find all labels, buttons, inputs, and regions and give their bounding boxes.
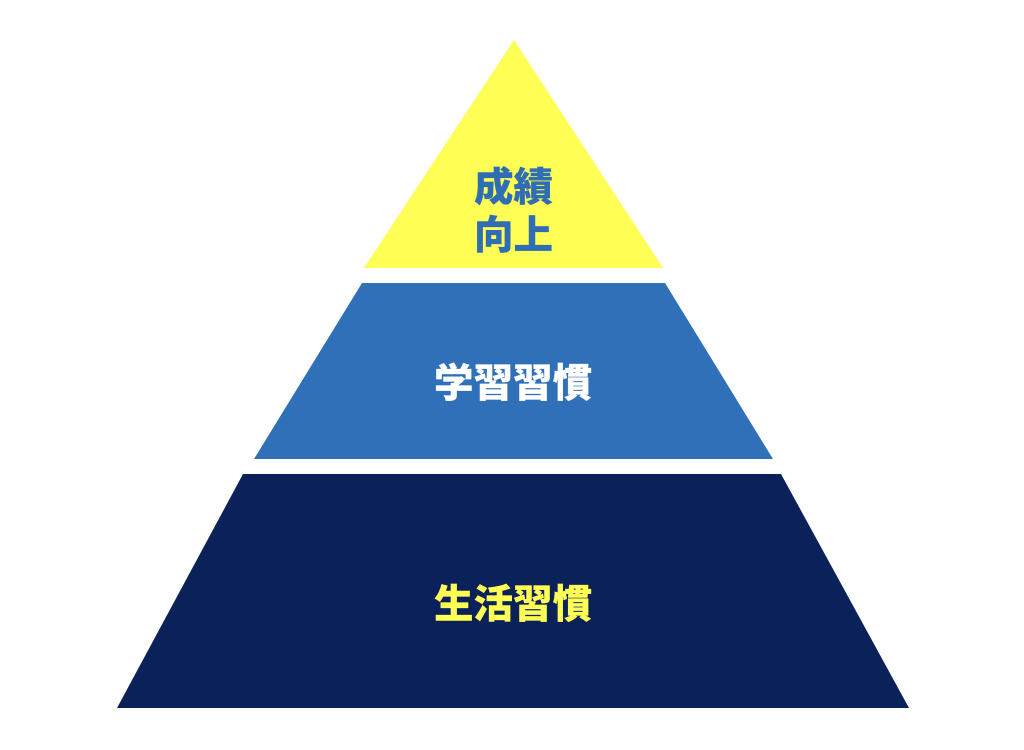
- top tier: 成績向上: 成績: [474, 165, 553, 210]
- middle tier: 学習習慣: [254, 283, 773, 459]
- top tier: 成績向上: [364, 40, 663, 268]
- bottom tier: 生活習慣: 生活習慣: [434, 583, 592, 627]
- bottom tier: 生活習慣: [117, 474, 909, 708]
- middle tier: 学習習慣: 学習習慣: [434, 362, 592, 406]
- top tier: 成績向上: 向上: [474, 214, 553, 258]
